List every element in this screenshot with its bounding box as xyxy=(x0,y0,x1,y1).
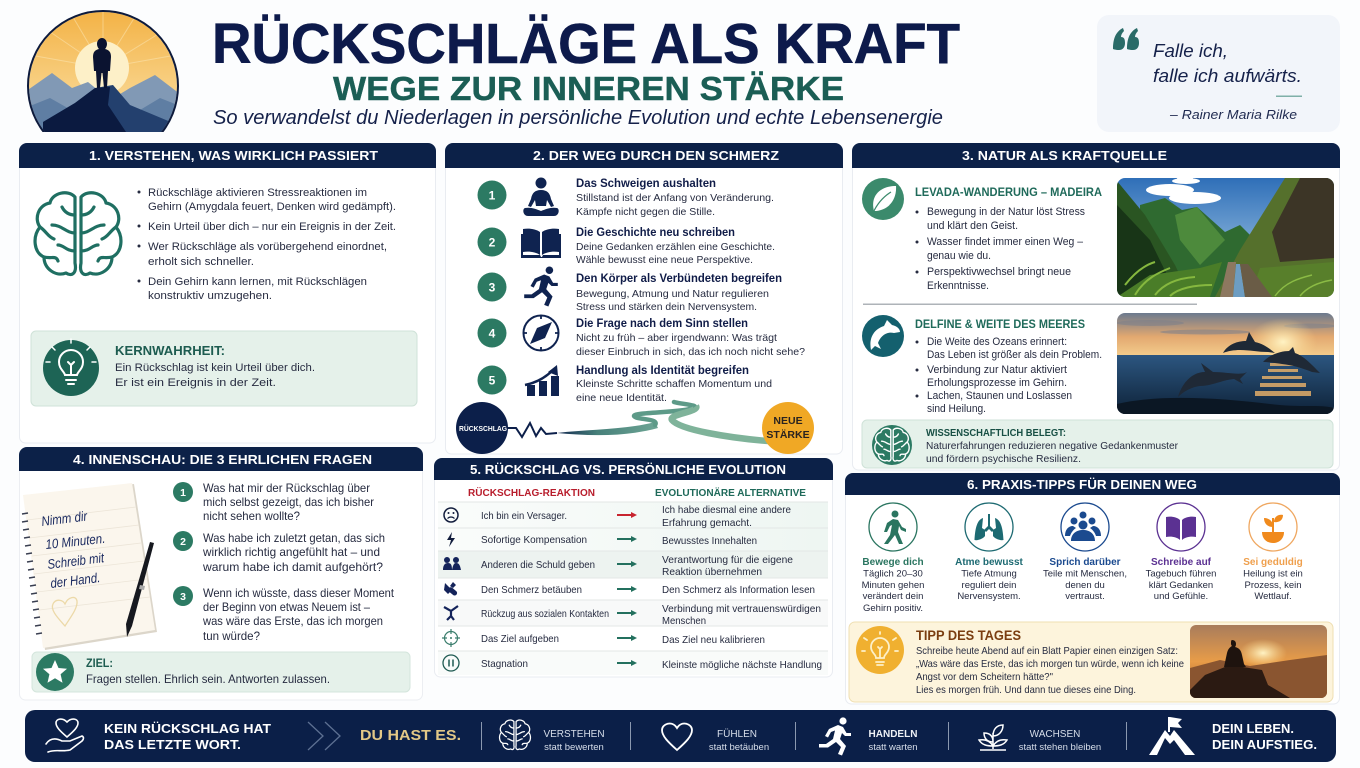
handeln xyxy=(819,717,918,756)
callout: core truth: Ein Rückschlag ist kein Urteil über dich. xyxy=(115,362,315,374)
you have it: DU HAST ES. xyxy=(360,727,461,744)
text: levada: Erkenntnisse. xyxy=(927,280,989,292)
row 6: Das Ziel aufgeben xyxy=(481,633,559,645)
fühlen: FÜHLEN xyxy=(717,728,757,740)
tip: breathe xyxy=(955,503,1024,602)
callout: core truth xyxy=(31,331,417,406)
callout: goal: Fragen stellen. Ehrlich sein. Antworten zulassen. xyxy=(86,672,330,686)
closing statement: DAS LETZTE WORT. xyxy=(104,737,241,752)
callout: tip of the day: Schreibe heute Abend auf ein Blatt Papier einen einzigen Satz: xyxy=(916,645,1178,657)
question 1 xyxy=(173,481,374,523)
step 5: Handlung als Identität begreifen xyxy=(576,365,749,377)
question 3: was wäre das Erste, das ich morgen xyxy=(202,614,383,628)
row 3 xyxy=(443,554,793,578)
row 2: Bewusstes Innehalten xyxy=(662,535,757,547)
row 3: Verantwortung für die eigene xyxy=(662,554,793,566)
step 2: Die Geschichte neu schreiben xyxy=(576,227,735,239)
row 1 xyxy=(444,504,791,529)
photo: levada valley xyxy=(1117,175,1334,297)
tip: move: Minuten gehen xyxy=(862,580,924,591)
closing statement xyxy=(104,721,271,752)
fühlen: statt betäuben xyxy=(709,742,769,753)
final statement: DEIN LEBEN. xyxy=(1212,721,1294,736)
verstehen: VERSTEHEN xyxy=(543,729,605,740)
icon: leaf xyxy=(862,178,904,220)
final statement xyxy=(1212,721,1317,752)
callout: science: WISSENSCHAFTLICH BELEGT: xyxy=(926,427,1066,439)
tip: write: Schreibe auf xyxy=(1151,557,1212,568)
question 3 xyxy=(173,586,395,643)
handeln: statt warten xyxy=(868,742,918,753)
step 3 xyxy=(478,266,782,313)
step 5: Kleinste Schritte schaffen Momentum und xyxy=(576,378,772,390)
icon: dolphin xyxy=(862,315,904,357)
step 5 xyxy=(478,365,772,404)
step 3: Den Körper als Verbündeten begreifen xyxy=(576,273,782,285)
row backgrounds xyxy=(438,502,828,675)
row 5: Verbindung mit vertrauenswürdigen xyxy=(662,603,821,615)
step 4: Nicht zu früh – aber irgendwann: Was trägt xyxy=(576,332,777,344)
tip: talk: Teile mit Menschen, xyxy=(1043,568,1127,580)
wachsen: WACHSEN xyxy=(1030,729,1080,740)
callout: science: und fördern psychische Resilienz. xyxy=(926,453,1081,465)
row 3: Anderen die Schuld geben xyxy=(481,559,595,571)
photo: person at sunset xyxy=(1190,625,1327,698)
question 1: mich selbst gezeigt, das ich bisher xyxy=(203,495,374,509)
handeln: HANDELN xyxy=(869,729,917,740)
callout: tip of the day: TIPP DES TAGES xyxy=(916,628,1021,643)
callout: goal: ZIEL: xyxy=(86,656,113,670)
step 3: 3 xyxy=(489,280,496,294)
illustration: notebook and pen: Nimm dir xyxy=(41,508,88,529)
panel: 3 nature as source of strength xyxy=(852,143,1340,470)
step 3: Stress und stärken dein Nervensystem. xyxy=(576,301,757,313)
row 4 xyxy=(444,582,815,597)
question 3: Wenn ich wüsste, dass dieser Moment xyxy=(203,586,395,600)
callout: tip of the day: „Was wäre das Erste, das ich morgen tun würde, wenn ich keine xyxy=(916,658,1184,670)
row 1: Erfahrung gemacht. xyxy=(662,517,752,529)
panel: 1 understanding xyxy=(19,143,436,443)
icon: heart in hand xyxy=(46,719,84,752)
tip: talk xyxy=(1043,503,1127,602)
bullet list: konstruktiv umzugehen. xyxy=(148,290,272,302)
row 6 xyxy=(442,629,765,647)
step 1: Stillstand ist der Anfang von Veränderung. xyxy=(576,192,774,204)
tip: patience: Sei geduldig xyxy=(1243,557,1303,568)
step 5: eine neue Identität. xyxy=(576,392,667,404)
callout: core truth: Er ist ein Ereignis in der Zeit. xyxy=(115,377,276,389)
column headings: RÜCKSCHLAG-REAKTION xyxy=(468,486,595,499)
step 1: Das Schweigen aushalten xyxy=(576,178,716,190)
step 4 xyxy=(478,315,805,358)
text: levada: und klärt den Geist. xyxy=(927,220,1018,232)
bullet list: Kein Urteil über dich – nur ein Ereignis in der Zeit. xyxy=(148,221,396,233)
panel: 4 introspection: 4. INNENSCHAU: DIE 3 EHRLICHEN FRAGEN xyxy=(73,452,372,467)
text: dolphins: Lachen, Staunen und Loslassen xyxy=(927,390,1072,402)
panel: 5 setback vs evolution table xyxy=(434,458,833,677)
bullet list: Gehirn (Amygdala feuert, Denken wird gedämpft). xyxy=(148,201,396,213)
subtitle: WEGE ZUR INNEREN STÄRKE xyxy=(333,70,844,107)
tip: patience xyxy=(1243,503,1303,602)
tip: breathe: Atme bewusst xyxy=(955,557,1024,568)
step 4: dieser Einbruch in sich, das ich noch nicht sehe? xyxy=(576,346,805,358)
text: levada: Wasser findet immer einen Weg – xyxy=(927,236,1084,248)
text: levada: LEVADA-WANDERUNG – MADEIRA xyxy=(915,187,1102,199)
row 5: Rückzug aus sozialen Kontakten xyxy=(481,608,609,620)
callout: tip of the day: Angst vor dem Scheitern hätte?" xyxy=(916,671,1053,683)
tip: write: und Gefühle. xyxy=(1154,591,1208,602)
logo: climber on the summit at sunrise xyxy=(27,10,179,132)
text: dolphins: DELFINE & WEITE DES MEERES xyxy=(915,319,1085,331)
wachsen: statt stehen bleiben xyxy=(1019,742,1101,753)
panel: 2 the way through pain: 2. DER WEG DURCH DEN SCHMERZ xyxy=(533,148,779,163)
question 2: wirklich richtig angefühlt hat – und xyxy=(202,545,380,559)
callout: core truth: KERNWAHRHEIT: xyxy=(115,344,225,358)
divider xyxy=(863,304,1197,305)
panel: 1 understanding: 1. VERSTEHEN, WAS WIRKLICH PASSIERT xyxy=(89,148,378,163)
bullet list: Wer Rückschläge als vorübergehend einordnet, xyxy=(148,241,387,253)
tip: move: Täglich 20–30 xyxy=(863,568,923,580)
step 2: Wähle bewusst eine neue Perspektive. xyxy=(576,254,753,266)
step 1 xyxy=(478,178,774,218)
illustration: notebook and pen xyxy=(22,483,157,650)
verstehen: statt bewerten xyxy=(544,742,604,753)
step 4: Die Frage nach dem Sinn stellen xyxy=(576,318,748,330)
tip: talk: vertraust. xyxy=(1065,591,1105,602)
text: dolphins: Verbindung zur Natur aktiviert xyxy=(927,364,1067,376)
quote box xyxy=(1097,15,1340,132)
text: dolphins: sind Heilung. xyxy=(927,403,986,415)
callout: tip of the day: Lies es morgen früh. Und dann tue dieses eine Ding. xyxy=(916,684,1136,696)
question 2: 2 xyxy=(180,536,186,548)
wachsen xyxy=(979,725,1101,753)
callout: goal xyxy=(32,652,410,692)
question 3: tun würde? xyxy=(203,629,260,643)
question 1: 1 xyxy=(180,487,186,499)
tip: move: Bewege dich xyxy=(862,557,924,568)
question 2: warum habe ich damit aufgehört? xyxy=(202,560,383,574)
tip: breathe: Tiefe Atmung xyxy=(961,568,1017,580)
bullet list: Dein Gehirn kann lernen, mit Rückschlägen xyxy=(148,276,367,288)
tip: write: Tagebuch führen xyxy=(1146,568,1216,580)
path graphic: from setback to new strength: NEUE xyxy=(773,415,803,427)
panel: 3 nature as source of strength: 3. NATUR ALS KRAFTQUELLE xyxy=(962,148,1167,163)
row 5 xyxy=(444,603,821,627)
tip: write: klärt Gedanken xyxy=(1149,580,1213,591)
illustration: notebook and pen: 10 Minuten. xyxy=(45,531,106,552)
step 2: Deine Gedanken erzählen eine Geschichte. xyxy=(576,241,775,253)
icon: brain xyxy=(35,193,121,275)
title: RÜCKSCHLÄGE ALS KRAFT xyxy=(212,12,960,75)
tip: move: verändert dein xyxy=(863,591,923,602)
column headings xyxy=(468,486,806,499)
fühlen xyxy=(662,724,769,753)
bullet list xyxy=(138,187,396,302)
bullet list: erholt sich schneller. xyxy=(148,256,254,268)
row 4: Den Schmerz als Information lesen xyxy=(662,584,815,596)
quote box: falle ich aufwärts. xyxy=(1153,65,1302,86)
tagline: So verwandelst du Niederlagen in persönliche Evolution und echte Lebensenergie xyxy=(213,106,943,129)
path graphic: from setback to new strength: RÜCKSCHLAG xyxy=(459,424,508,433)
question 2: Was habe ich zuletzt getan, das sich xyxy=(203,531,385,545)
text: dolphins: Das Leben ist größer als dein Problem. xyxy=(927,349,1102,361)
tip: patience: Wettlauf. xyxy=(1254,591,1292,602)
final statement: DEIN AUFSTIEG. xyxy=(1212,737,1317,752)
row 2 xyxy=(447,532,757,547)
step 3: Bewegung, Atmung und Natur regulieren xyxy=(576,288,769,300)
row 3: Reaktion übernehmen xyxy=(662,566,762,578)
question 3: der Beginn von etwas Neuem ist – xyxy=(203,600,370,614)
illustration: notebook and pen: der Hand. xyxy=(50,570,101,591)
callout: science xyxy=(862,420,1333,468)
row 7: Kleinste mögliche nächste Handlung xyxy=(662,659,822,671)
row 1: Ich habe diesmal eine andere xyxy=(662,504,791,516)
callout: tip of the day xyxy=(849,622,1333,702)
step 4: 4 xyxy=(489,326,496,340)
text: levada: Bewegung in der Natur löst Stress xyxy=(927,206,1085,218)
illustration: notebook and pen: Schreib mit xyxy=(47,550,106,572)
row 7 xyxy=(443,655,822,671)
panel: 2 the way through pain xyxy=(445,143,843,454)
tip: talk: Sprich darüber xyxy=(1049,557,1121,568)
text: levada: Perspektivwechsel bringt neue xyxy=(927,266,1071,278)
row 7: Stagnation xyxy=(481,658,528,670)
bullet list: Rückschläge aktivieren Stressreaktionen im xyxy=(148,187,367,199)
path graphic: from setback to new strength: STÄRKE xyxy=(766,428,810,441)
text: dolphins xyxy=(915,319,1102,415)
step 5: 5 xyxy=(489,374,496,388)
row 4: Den Schmerz betäuben xyxy=(481,584,582,596)
text: levada: genau wie du. xyxy=(927,250,991,262)
text: dolphins: Die Weite des Ozeans erinnert: xyxy=(927,336,1067,348)
tip: patience: Prozess, kein xyxy=(1244,580,1302,591)
step 1: Kämpfe nicht gegen die Stille. xyxy=(576,206,715,218)
panel: 4 introspection xyxy=(19,447,423,700)
row 1: Ich bin ein Versager. xyxy=(481,510,567,522)
row 5: Menschen xyxy=(662,615,706,627)
icon: mountain with flag xyxy=(1149,717,1195,755)
step 2 xyxy=(478,227,775,266)
question 2 xyxy=(173,531,385,574)
step 1: 1 xyxy=(489,188,496,202)
tip: patience: Heilung ist ein xyxy=(1243,568,1303,580)
quote box: Falle ich, xyxy=(1153,40,1228,61)
question 1: nicht sehen wollte? xyxy=(203,509,300,523)
verstehen xyxy=(500,720,605,753)
tip: talk: denen du xyxy=(1065,580,1105,591)
closing statement: KEIN RÜCKSCHLAG HAT xyxy=(104,721,271,736)
quote box: – Rainer Maria Rilke xyxy=(1169,108,1297,122)
tip: move: Gehirn positiv. xyxy=(863,603,923,614)
tip: breathe: Nervensystem. xyxy=(957,591,1021,602)
tip: breathe: reguliert dein xyxy=(962,580,1016,591)
text: levada xyxy=(915,187,1102,292)
path graphic: from setback to new strength xyxy=(456,402,814,454)
panel: 6 practice tips: 6. PRAXIS-TIPPS FÜR DEINEN WEG xyxy=(967,477,1197,492)
panel: 5 setback vs evolution table: 5. RÜCKSCHLAG VS. PERSÖNLICHE EVOLUTION xyxy=(470,462,786,477)
row 6: Das Ziel neu kalibrieren xyxy=(662,634,765,646)
row 2: Sofortige Kompensation xyxy=(481,534,587,546)
tip: write xyxy=(1146,503,1216,602)
chevrons xyxy=(308,722,340,750)
question 1: Was hat mir der Rückschlag über xyxy=(203,481,370,495)
question 3: 3 xyxy=(180,591,186,603)
step 2: 2 xyxy=(489,236,496,250)
panel: 6 practice tips xyxy=(845,473,1340,704)
footer banner xyxy=(25,710,1336,762)
photo: dolphins at sunset xyxy=(1116,313,1336,414)
text: dolphins: Erholungsprozesse im Gehirn. xyxy=(927,377,1067,389)
tip: move xyxy=(862,503,924,614)
callout: science: Naturerfahrungen reduzieren negative Gedankenmuster xyxy=(926,440,1178,452)
column headings: EVOLUTIONÄRE ALTERNATIVE xyxy=(655,486,806,499)
